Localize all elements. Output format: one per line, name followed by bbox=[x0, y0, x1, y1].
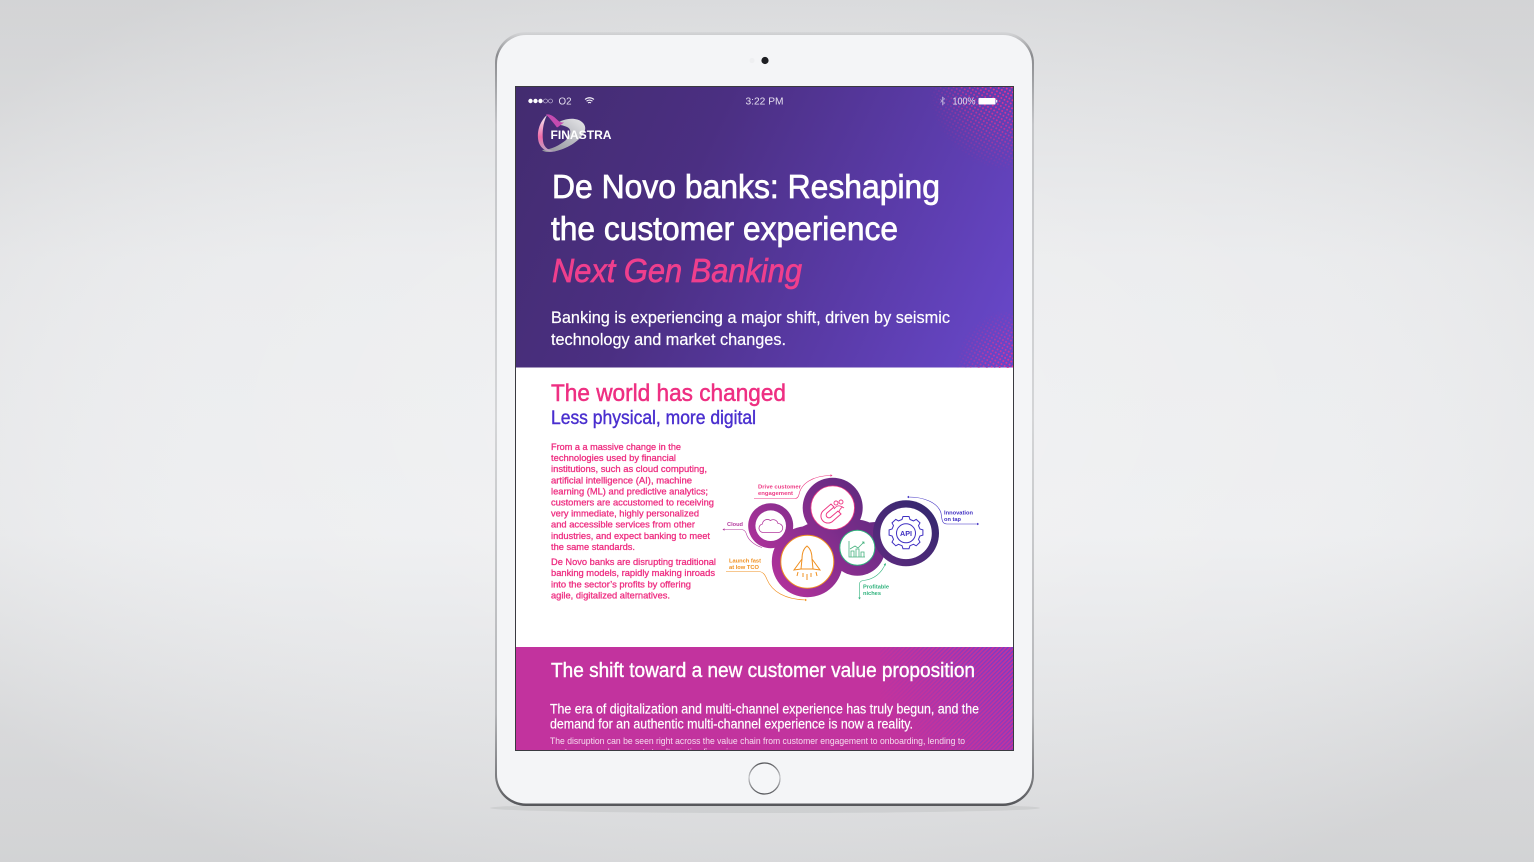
heading: The shift toward a new customer value proposition bbox=[551, 659, 975, 682]
body text bbox=[551, 442, 716, 600]
lead text: The era of digitalization and multi-channel experience has truly begun, and the bbox=[550, 702, 979, 716]
panel: customer value proposition bbox=[516, 647, 1013, 758]
title: the customer experience bbox=[551, 210, 898, 247]
logo: Finastra: FINASTRA bbox=[550, 130, 612, 142]
status bar: 3:22 PM bbox=[746, 96, 784, 108]
small text: The disruption can be seen right across the value chain from customer engagement to onboarding, lending to bbox=[550, 736, 965, 747]
body text: institutions, such as cloud computing, bbox=[551, 464, 707, 474]
panel: purple header bbox=[516, 87, 1013, 368]
heading: The world has changed bbox=[551, 380, 786, 407]
icon: chart bbox=[840, 530, 875, 565]
body text: banking models, rapidly making inroads bbox=[551, 568, 715, 578]
status bar: 100% bbox=[952, 96, 976, 108]
icon: API gear bbox=[880, 508, 932, 559]
icon: API gear: API bbox=[900, 529, 912, 538]
label: launch fast bbox=[726, 558, 807, 601]
label: profitable niches: niches bbox=[863, 591, 881, 597]
screen border bbox=[516, 86, 1014, 750]
label: innovation on tap bbox=[907, 496, 979, 525]
lead text: demand for an authentic multi-channel experience is now a reality. bbox=[550, 716, 913, 732]
icon: rocket bbox=[781, 535, 834, 588]
body text: industries, and expect banking to meet bbox=[551, 531, 710, 541]
diagram: connected circles bbox=[722, 474, 979, 601]
title: Next Gen Banking bbox=[552, 252, 803, 289]
label: launch fast: at low TCO bbox=[729, 565, 760, 571]
tablet device frame bbox=[495, 32, 1034, 806]
connected ring shapes bbox=[748, 478, 885, 597]
body text: From a a massive change in the bbox=[551, 442, 681, 452]
label: cloud: Cloud bbox=[727, 522, 744, 528]
intro text bbox=[551, 309, 950, 349]
small text: mortgages, and payments to alternative financing. bbox=[550, 747, 740, 758]
label: drive customer engagement bbox=[754, 474, 832, 498]
icon: cloud bbox=[755, 510, 786, 541]
intro text: technology and market changes. bbox=[551, 331, 786, 349]
label: cloud bbox=[722, 522, 762, 548]
body text: customers are accustomed to receiving bbox=[551, 498, 714, 508]
body text: agile, digitalized alternatives. bbox=[551, 590, 670, 600]
body text: De Novo banks are disrupting traditional bbox=[551, 557, 716, 567]
title: De Novo banks: Reshaping bbox=[552, 168, 940, 205]
body text: into the sector’s profits by offering bbox=[551, 579, 691, 589]
lead text bbox=[550, 702, 979, 732]
icon: magnet and people bbox=[811, 486, 854, 530]
panel: the world has changed bbox=[551, 380, 979, 601]
icon: wifi bbox=[585, 98, 594, 103]
label: launch fast: Launch fast bbox=[729, 558, 761, 564]
icon: battery bbox=[978, 98, 997, 104]
body text: technologies used by financial bbox=[551, 453, 676, 463]
body text: very immediate, highly personalized bbox=[551, 509, 699, 519]
icon: signal dots bbox=[528, 99, 552, 103]
tablet screen bbox=[516, 87, 1013, 758]
title bbox=[551, 168, 940, 289]
icon: home button bbox=[749, 763, 780, 794]
heading bbox=[551, 380, 786, 429]
body text: the same standards. bbox=[551, 542, 635, 552]
label: innovation on tap: on tap bbox=[944, 517, 962, 523]
heading: Less physical, more digital bbox=[551, 408, 756, 429]
label: drive customer engagement: Drive customer bbox=[758, 484, 802, 490]
label: profitable niches bbox=[858, 563, 889, 600]
body text: and accessible services from other bbox=[551, 520, 695, 530]
intro text: Banking is experiencing a major shift, driven by seismic bbox=[551, 309, 950, 327]
logo: Finastra bbox=[538, 114, 612, 152]
status bar: O2 bbox=[558, 96, 572, 108]
label: profitable niches: Profitable bbox=[863, 584, 889, 590]
label: drive customer engagement: engagement bbox=[758, 491, 793, 497]
body text: learning (ML) and predictive analytics; bbox=[551, 486, 708, 496]
icon: bluetooth bbox=[940, 97, 944, 105]
label: innovation on tap: Innovation bbox=[944, 510, 974, 516]
body text: artificial intelligence (AI), machine bbox=[551, 475, 692, 485]
small text bbox=[550, 738, 965, 750]
icon: front camera bbox=[749, 57, 769, 64]
status bar bbox=[528, 96, 998, 106]
